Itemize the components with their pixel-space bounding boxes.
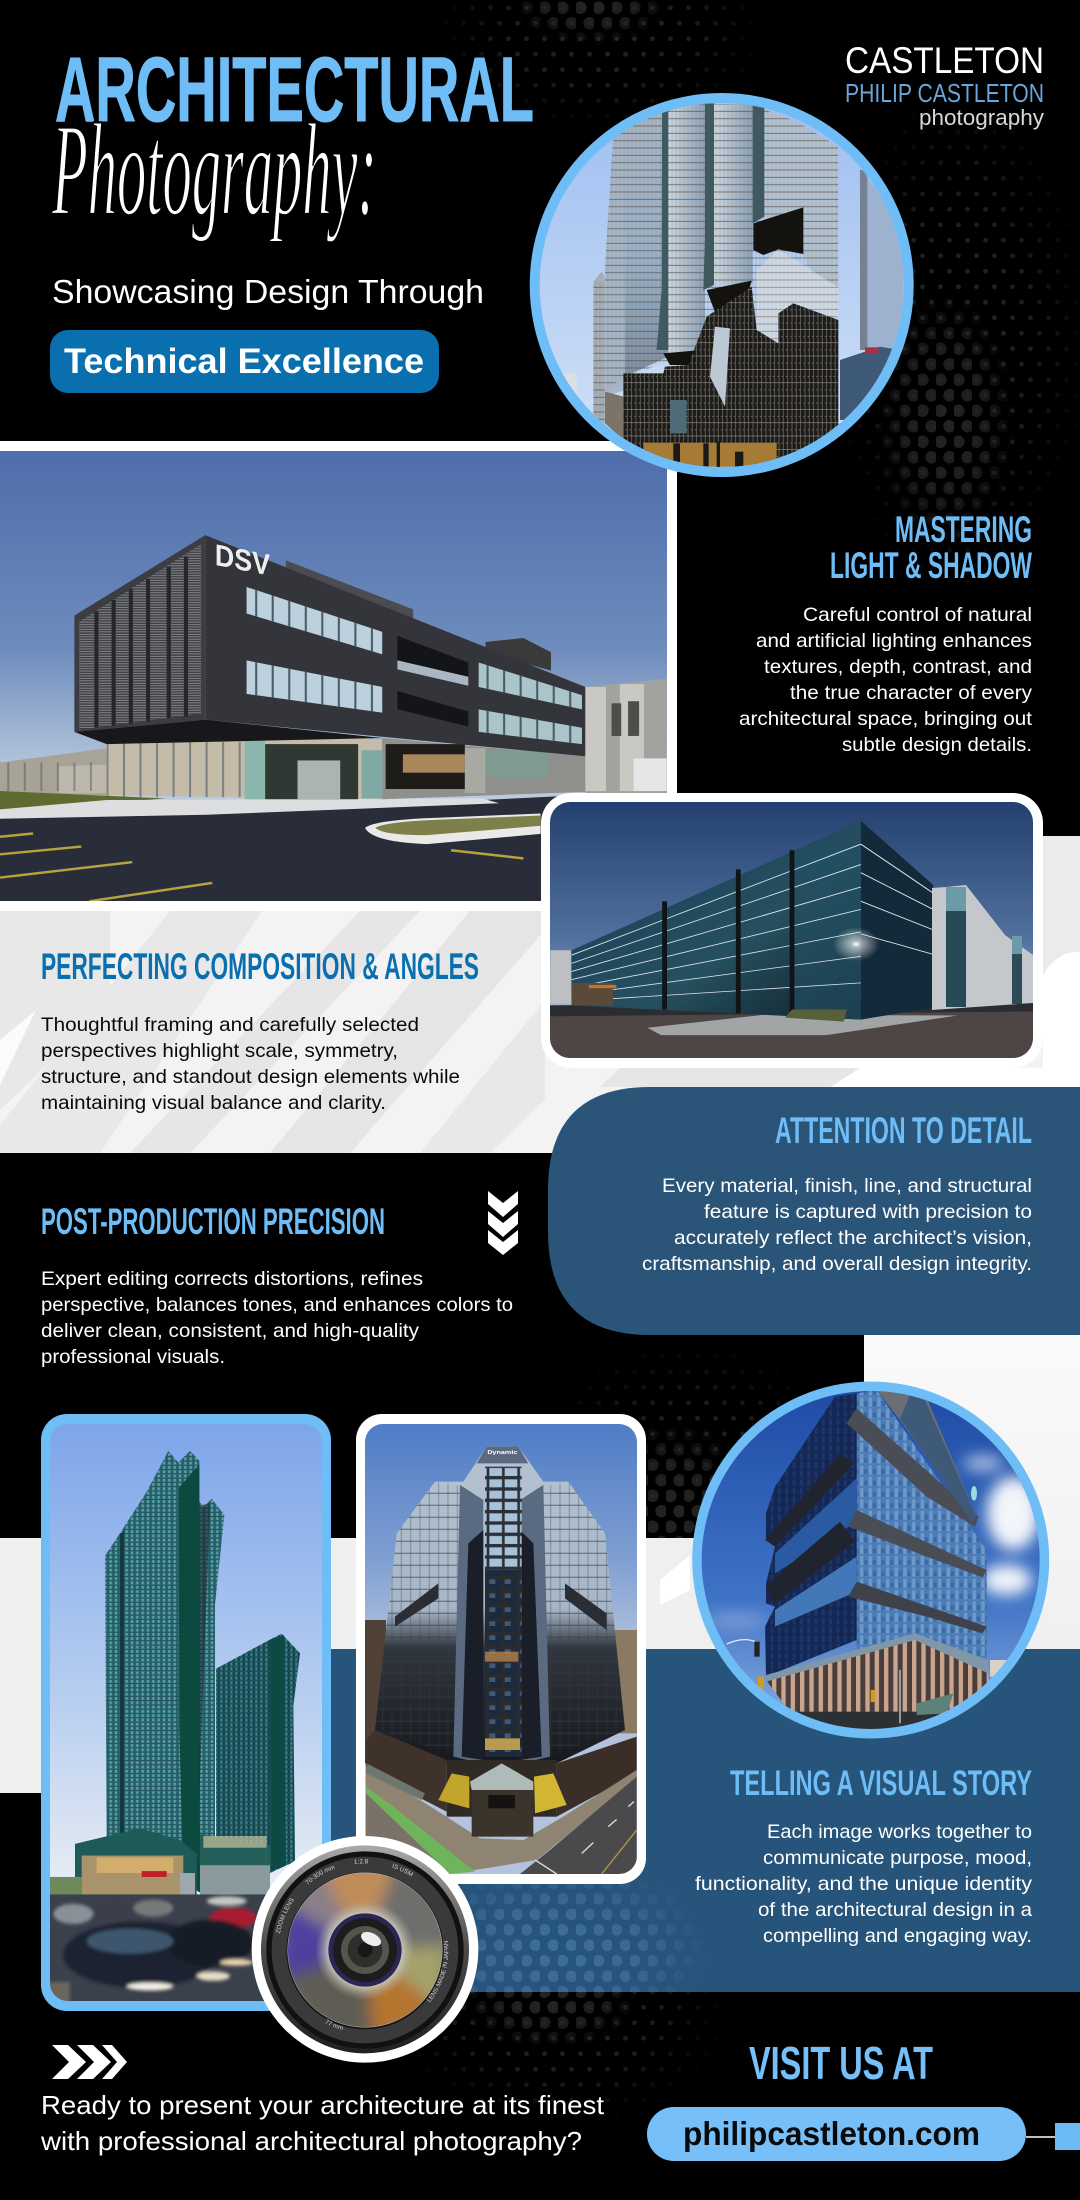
heading: visit us at: VISIT US AT <box>749 2037 933 2089</box>
heading: mastering light and shadow <box>830 509 1032 586</box>
text: mastering light and shadow body: Careful control of natural <box>803 604 1032 626</box>
icon: camera lens <box>252 1836 478 2063</box>
text: perfecting composition body: maintaining visual balance and clarity. <box>41 1092 386 1114</box>
text: mastering light and shadow body: subtle design details. <box>842 734 1032 756</box>
infographic canvas: Photography: <box>52 96 377 243</box>
call to action text <box>40 2090 605 2156</box>
text: telling a visual story body: functionality, and the unique identity <box>695 1873 1032 1895</box>
halftone dots <box>380 0 1080 2122</box>
wing of warehouse <box>932 885 1033 1010</box>
text: telling a visual story body: of the architectural design in a <box>758 1899 1032 1921</box>
lens engraved text: 1:2.8 <box>354 1859 368 1864</box>
text: mastering light and shadow body <box>739 604 1033 756</box>
photo card: glass warehouse <box>541 793 1043 1068</box>
photo card: teal towers <box>41 1414 331 2011</box>
text: mastering light and shadow body: architectural space, bringing out <box>739 708 1033 730</box>
pill: website: philipcastleton.com <box>683 2115 980 2152</box>
pill: website <box>647 2107 1026 2161</box>
panel: post-production precision <box>41 1201 513 1368</box>
pill: technical excellence <box>50 330 439 393</box>
heading: post-production precision: POST-PRODUCTION PRECISION <box>41 1201 385 1242</box>
text: attention to detail body: craftsmanship, and overall design integrity. <box>642 1253 1032 1275</box>
background: lower blue band <box>322 1649 1080 1992</box>
heading: perfecting composition and angles: PERFECTING COMPOSITION & ANGLES <box>41 946 479 987</box>
photo circle: glass tower <box>530 90 920 480</box>
text: post-production body: deliver clean, consistent, and high-quality <box>41 1320 419 1342</box>
logo: castleton: photography <box>919 105 1044 130</box>
text: post-production body: Expert editing corrects distortions, refines <box>41 1268 423 1290</box>
lens engraved text: 77 mm <box>326 2019 343 2030</box>
text: perfecting composition body: structure, and standout design elements while <box>41 1066 460 1088</box>
lens engraved text: 70-300 mm <box>305 1866 335 1884</box>
photo: DSV building <box>0 448 668 903</box>
lens engraved text <box>276 1859 448 2030</box>
text: telling a visual story body: compelling and engaging way. <box>763 1925 1032 1947</box>
text: mastering light and shadow body: textures, depth, contrast, and <box>764 656 1032 678</box>
text: post-production body: perspective, balances tones, and enhances colors to <box>41 1294 513 1316</box>
text: mastering light and shadow body: and artificial lighting enhances <box>756 630 1032 652</box>
panel: attention to detail <box>548 1087 1080 1335</box>
photo circle: stacked blue tower <box>692 1382 1050 1740</box>
lens engraved text: IS USM <box>392 1864 414 1876</box>
text: perfecting composition body <box>41 1014 460 1114</box>
call to action text: with professional architectural photography? <box>40 2126 582 2156</box>
logo: castleton <box>845 40 1044 130</box>
photo card: office tower: Dynamic <box>487 1450 517 1456</box>
pill: technical excellence: Technical Excellence <box>64 342 424 381</box>
text: telling a visual story body <box>695 1821 1032 1947</box>
text: post-production body: professional visuals. <box>41 1346 225 1368</box>
text: attention to detail body: accurately reflect the architect’s vision, <box>674 1227 1032 1249</box>
text: attention to detail body <box>642 1175 1032 1275</box>
logo: castleton: CASTLETON <box>845 40 1044 81</box>
photo: DSV building: DSV <box>215 538 270 582</box>
text: attention to detail body: feature is captured with precision to <box>704 1201 1032 1223</box>
icon: right chevrons <box>52 2045 127 2079</box>
photo card: office tower <box>356 1414 646 1884</box>
icon: down chevrons <box>488 1191 518 1255</box>
background: lower right light panel <box>0 1335 1080 1793</box>
lens engraved text: ZOOM LENS <box>276 1898 294 1934</box>
text: telling a visual story body: communicate purpose, mood, <box>763 1847 1032 1869</box>
text: mastering light and shadow body: the true character of every <box>790 682 1032 704</box>
subtitle: showcasing design through: Showcasing Design Through <box>52 273 484 310</box>
text: telling a visual story body: Each image works together to <box>767 1821 1032 1843</box>
panel: telling a visual story <box>695 1764 1032 1947</box>
background: light panel with diagonal stripes <box>0 911 1080 1153</box>
panel: mastering light and shadow <box>739 509 1033 756</box>
panel: perfecting composition and angles <box>41 946 479 1114</box>
text: attention to detail body: Every material, finish, line, and structural <box>662 1175 1032 1197</box>
title: architectural: ARCHITECTURAL <box>55 39 534 141</box>
background: upper right light panel with cloud <box>830 836 1080 1088</box>
text: perfecting composition body: Thoughtful framing and carefully selected <box>41 1014 419 1036</box>
lens engraved text: LENS MADE IN JAPAN <box>426 1941 448 2002</box>
call to action text: Ready to present your architecture at its finest <box>41 2090 605 2120</box>
text: perfecting composition body: perspectives highlight scale, symmetry, <box>41 1040 398 1062</box>
white frame around photo <box>0 441 677 911</box>
text: post-production body <box>41 1268 513 1368</box>
connector to square <box>1026 2123 1080 2150</box>
